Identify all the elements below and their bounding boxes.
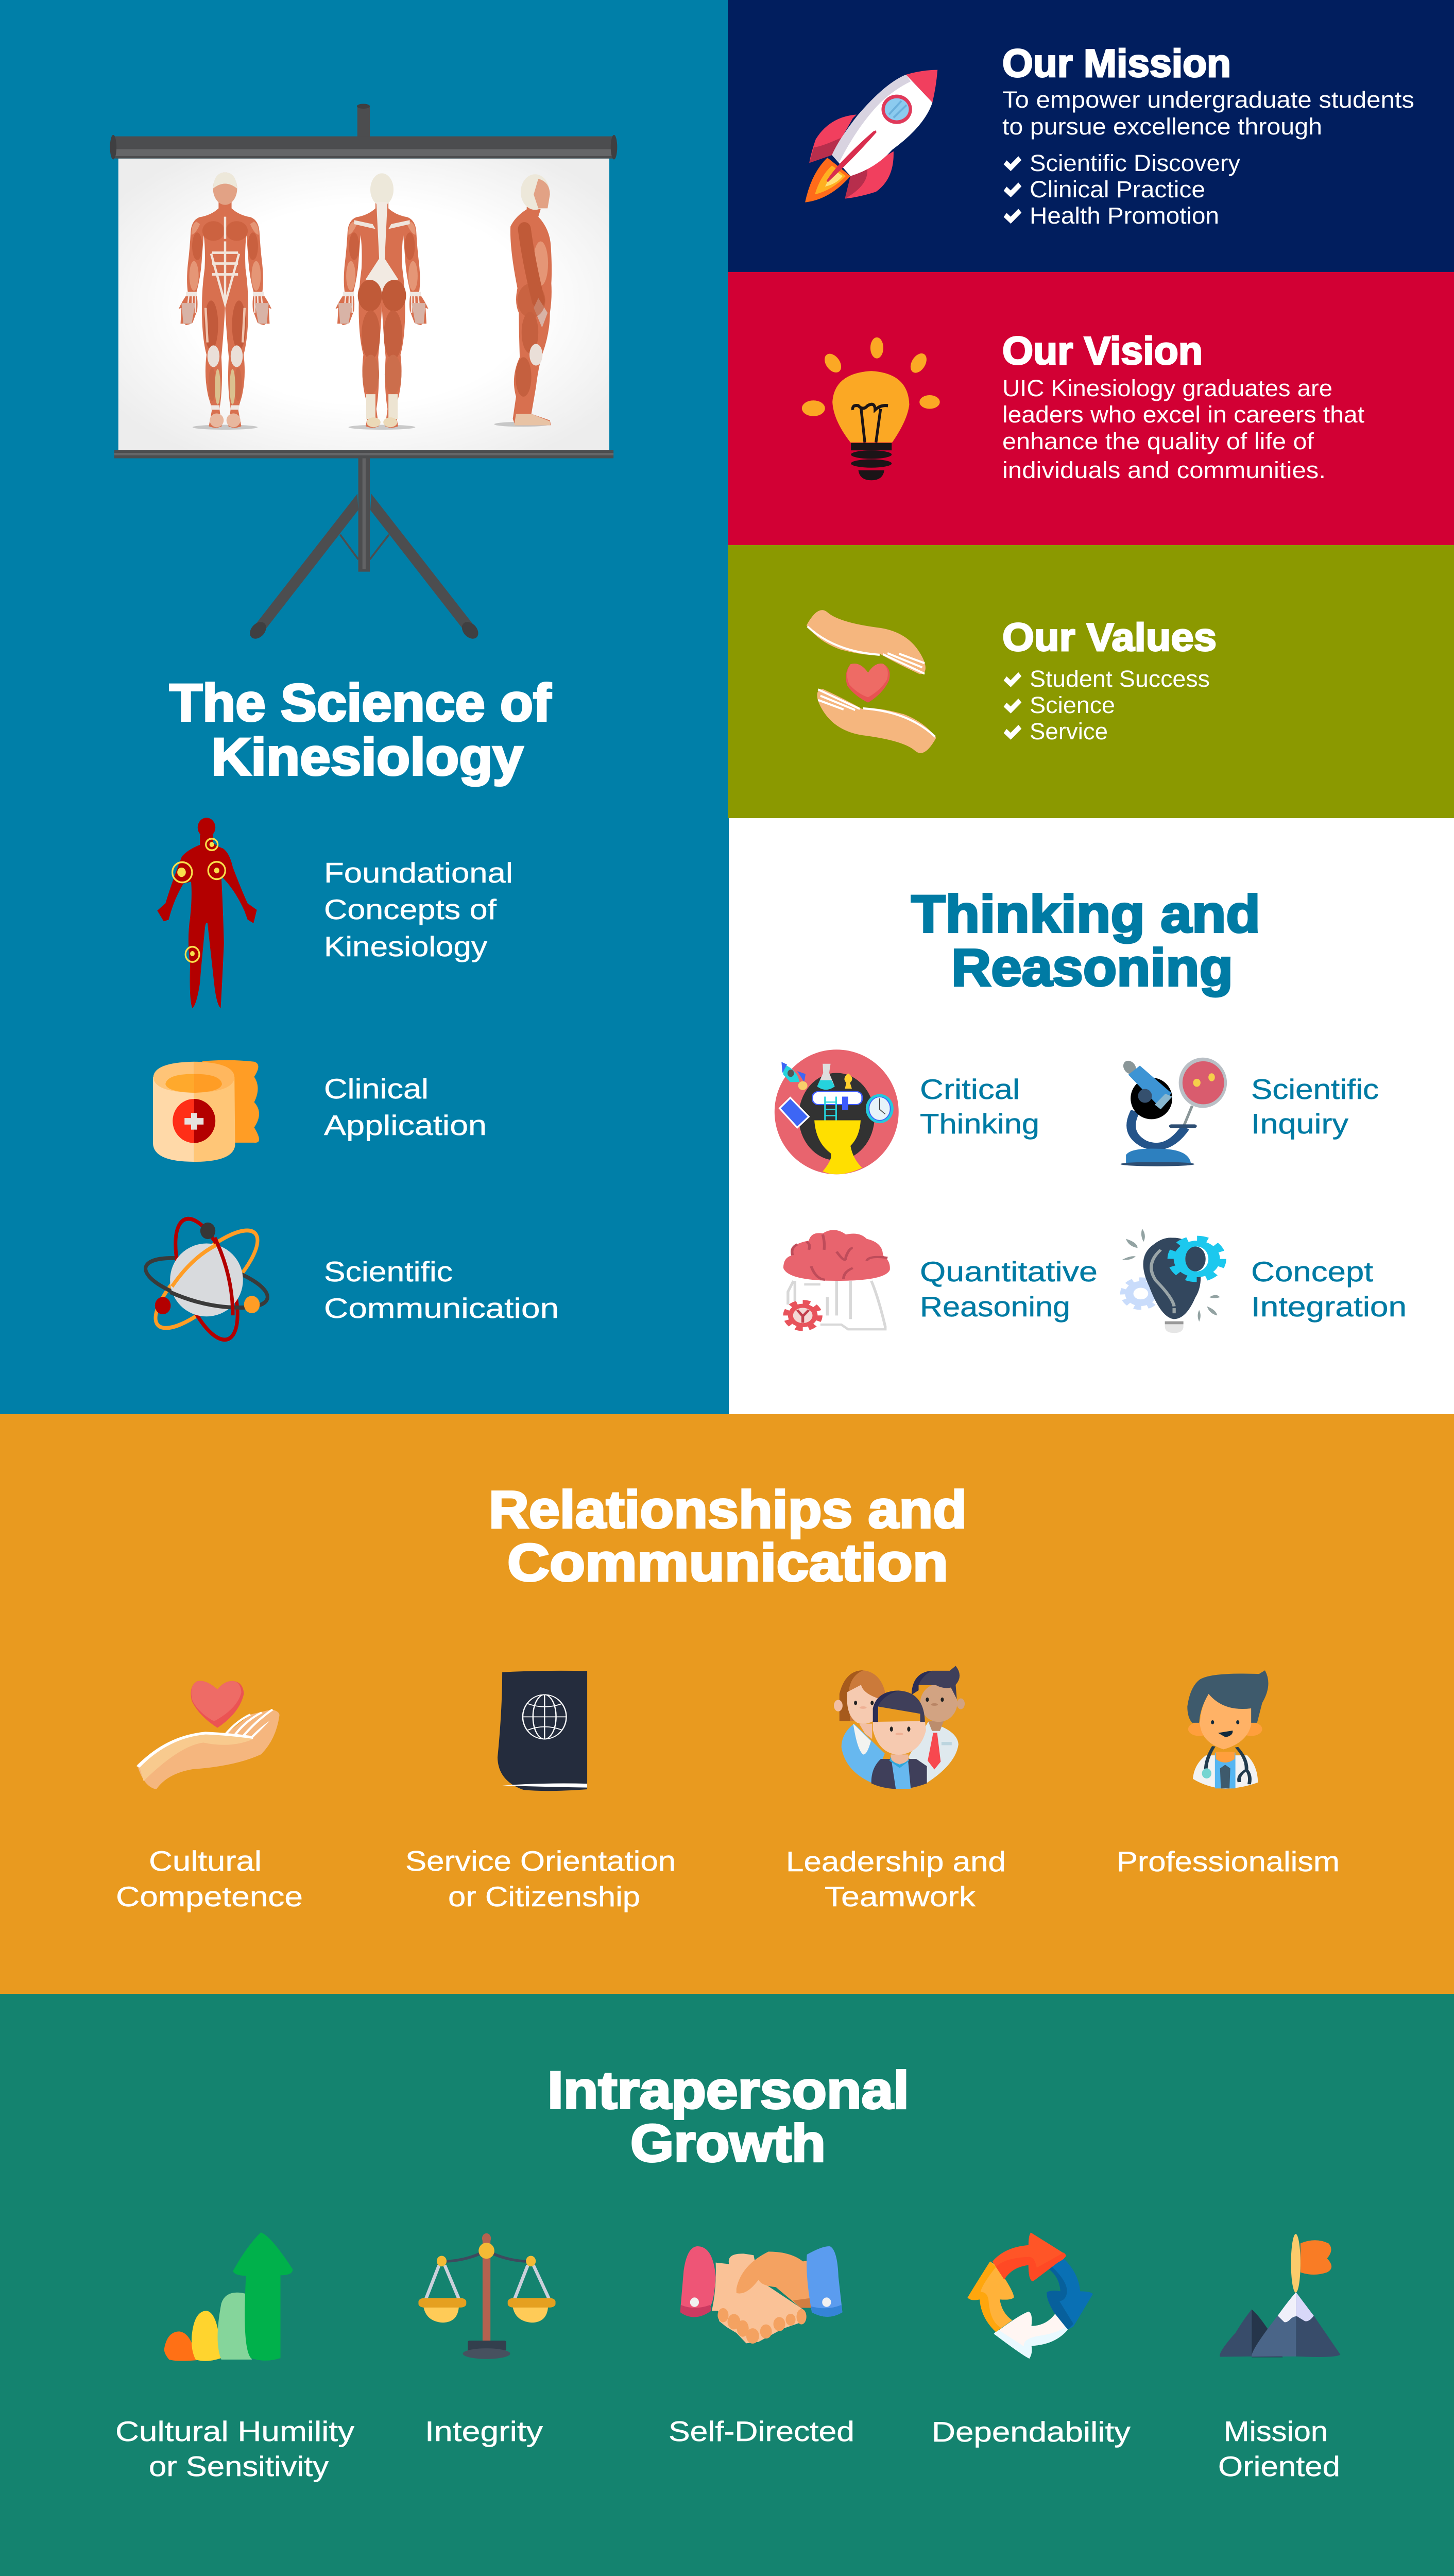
icon: bulb with gears: [1122, 1229, 1223, 1333]
panel: our vision: [728, 272, 1454, 545]
heading: Intrapersonal Growth: [548, 2061, 909, 2173]
label: Cultural Humility or Sensitivity: [115, 2415, 355, 2482]
list: values items: [1005, 666, 1210, 744]
label: Critical Thinking: Critical: [920, 1073, 1020, 1105]
icon: atom: [142, 1210, 271, 1349]
text: vision statement: individuals and communities.: [1002, 457, 1326, 483]
label: Scientific Inquiry: [1251, 1073, 1379, 1140]
label: Concept Integration: [1251, 1256, 1407, 1323]
list: mission items: Scientific Discovery: [1030, 150, 1241, 176]
list: values items: Student Success: [1030, 666, 1210, 692]
label: Foundational Concepts of Kinesiology: Foundational: [324, 857, 513, 889]
icon: bandage roll: [153, 1060, 259, 1162]
icon: team of people: [834, 1666, 965, 1789]
label: Mission Oriented: [1218, 2415, 1340, 2482]
figure: anatomy back view: [335, 173, 429, 430]
text: mission statement: to pursue excellence through: [1002, 113, 1322, 140]
heading: Intrapersonal Growth: Intrapersonal: [548, 2061, 909, 2120]
icon: mountain with flag: [1220, 2234, 1340, 2358]
heading: Intrapersonal Growth: Growth: [630, 2114, 826, 2173]
label: Dependability: Dependability: [932, 2416, 1131, 2448]
label: Integrity: Integrity: [425, 2415, 543, 2447]
heading: Thinking and Reasoning: Reasoning: [951, 938, 1233, 997]
panel: intrapersonal growth: [0, 1994, 1454, 2576]
label: Leadership and Teamwork: Leadership and: [786, 1845, 1006, 1877]
figure: anatomy side view: [494, 174, 552, 427]
heading: Relationships and Communication: Relationships and: [489, 1480, 967, 1539]
label: Leadership and Teamwork: [786, 1845, 1006, 1912]
icon: critical thinking head: [775, 1049, 899, 1174]
panel: relationships and communication: [0, 1414, 1454, 1994]
label: Scientific Communication: Scientific: [324, 1256, 453, 1287]
heading: Relationships and Communication: Communication: [507, 1533, 948, 1592]
label: Cultural Humility or Sensitivity: or Sensitivity: [149, 2450, 329, 2482]
title: The Science of Kinesiology: [169, 673, 552, 786]
label: Scientific Communication: [324, 1256, 559, 1324]
label: Clinical Application: Clinical: [324, 1073, 429, 1105]
icon: heart in hand: [137, 1681, 280, 1789]
label: Foundational Concepts of Kinesiology: Concepts of: [324, 893, 497, 925]
text: vision statement: enhance the quality of life of: [1002, 428, 1314, 454]
label: Mission Oriented: Oriented: [1218, 2450, 1340, 2482]
heading: Thinking and Reasoning: Thinking and: [911, 885, 1260, 943]
panel: the science of kinesiology: [0, 0, 729, 1414]
icon: growth bars with arrow: [164, 2232, 293, 2361]
label: Cultural Humility or Sensitivity: Cultural Humility: [115, 2415, 355, 2447]
panel: our mission: [728, 0, 1454, 272]
icon: microscope: [1120, 1058, 1227, 1166]
label: Scientific Inquiry: Inquiry: [1251, 1108, 1349, 1140]
text: vision statement: UIC Kinesiology graduates are: [1002, 375, 1332, 401]
label: Service Orientation or Citizenship: or Citizenship: [448, 1880, 640, 1912]
label: Mission Oriented: Mission: [1224, 2415, 1328, 2447]
label: Scientific Inquiry: Scientific: [1251, 1073, 1379, 1105]
label: Cultural Competence: [116, 1845, 303, 1912]
heading: Thinking and Reasoning: [911, 885, 1260, 997]
icon: red human body with joints: [157, 818, 257, 1008]
label: Service Orientation or Citizenship: Service Orientation: [405, 1845, 676, 1877]
icon: cycle arrows: [968, 2232, 1093, 2359]
icon: caring hands with heart: [807, 610, 936, 753]
panel: thinking and reasoning: [729, 818, 1454, 1414]
text: vision statement: [1002, 375, 1365, 483]
label: Cultural Competence: Cultural: [149, 1845, 262, 1877]
label: Scientific Communication: Communication: [324, 1292, 559, 1324]
label: Clinical Application: [324, 1073, 487, 1141]
icon: handshake: [680, 2246, 843, 2344]
label: Concept Integration: Concept: [1251, 1256, 1373, 1287]
list: mission items: [1005, 150, 1241, 229]
label: Professionalism: Professionalism: [1117, 1845, 1340, 1877]
heading: Our Mission: Our Mission: [1002, 42, 1231, 86]
icon: passport: [498, 1671, 587, 1791]
panel: our values: [728, 545, 1454, 818]
label: Service Orientation or Citizenship: [405, 1845, 676, 1912]
label: Quantitative Reasoning: Reasoning: [920, 1291, 1070, 1323]
icon: projector screen with anatomy figures: [110, 104, 617, 642]
label: Leadership and Teamwork: Teamwork: [825, 1880, 976, 1912]
heading: Relationships and Communication: [489, 1480, 967, 1592]
label: Quantitative Reasoning: Quantitative: [920, 1256, 1098, 1287]
list: values items: Service: [1030, 718, 1108, 744]
label: Foundational Concepts of Kinesiology: Kinesiology: [324, 930, 488, 962]
icon: balance scales: [418, 2233, 556, 2359]
icon: brain with gear: [783, 1230, 890, 1329]
label: Critical Thinking: [920, 1073, 1039, 1140]
label: Concept Integration: Integration: [1251, 1291, 1407, 1323]
text: vision statement: leaders who excel in careers that: [1002, 401, 1365, 428]
title: The Science of Kinesiology: Kinesiology: [211, 727, 523, 786]
list: mission items: Health Promotion: [1030, 202, 1219, 229]
heading: Our Vision: Our Vision: [1002, 329, 1203, 373]
label: Clinical Application: Application: [324, 1109, 487, 1141]
icon: light bulb: [802, 337, 940, 480]
text: mission statement: To empower undergraduate students: [1002, 87, 1414, 113]
list: values items: Science: [1030, 692, 1115, 718]
label: Quantitative Reasoning: [920, 1256, 1098, 1323]
icon: rocket: [805, 70, 937, 202]
label: Cultural Competence: Competence: [116, 1880, 303, 1912]
label: Critical Thinking: Thinking: [920, 1108, 1039, 1140]
icon: doctor: [1187, 1670, 1268, 1789]
heading: Our Values: Our Values: [1002, 616, 1217, 659]
label: Foundational Concepts of Kinesiology: [324, 857, 513, 962]
text: mission statement: [1002, 87, 1414, 140]
figure: anatomy front view: [179, 172, 271, 430]
label: Self-Directed: Self-Directed: [669, 2415, 854, 2447]
list: mission items: Clinical Practice: [1030, 176, 1205, 202]
title: The Science of Kinesiology: The Science of: [169, 673, 552, 732]
